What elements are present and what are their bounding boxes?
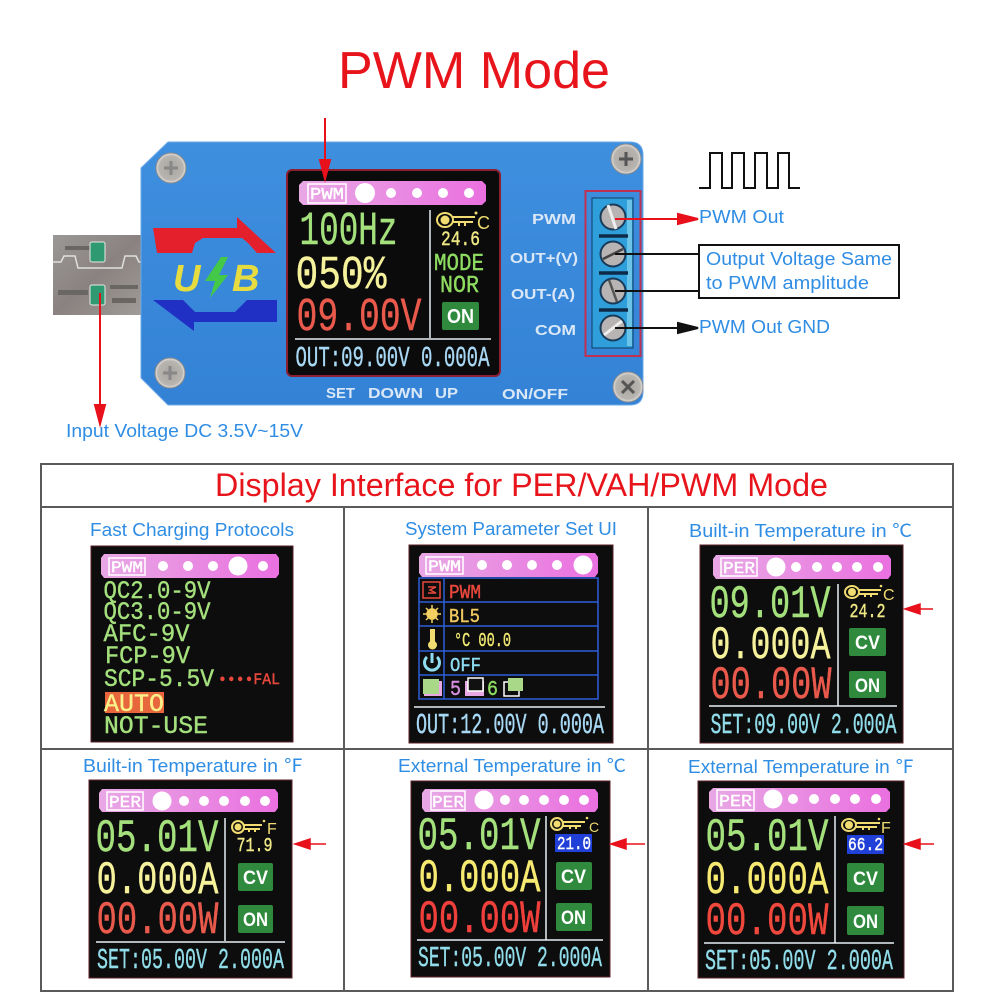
device key labels: PWM <box>532 211 576 228</box>
screen: built-in temperature F: SET:05.00V 2.000A <box>97 944 284 977</box>
screen: built-in temperature F: PER <box>109 794 141 813</box>
screen: built-in temperature F: F <box>267 821 277 838</box>
heading: external C: External Temperature in ℃ <box>398 756 626 776</box>
icon: USB logo with arrows: B <box>232 258 259 300</box>
screw: bottom right <box>613 372 643 402</box>
screen: external temperature C: 21.0 <box>557 835 591 855</box>
screen: built-in temperature C: SET:09.00V 2.000A <box>710 709 897 742</box>
device key labels: SET <box>326 385 355 402</box>
main display: PWM screen: PWM <box>310 186 344 205</box>
device key labels: OUT+(V) <box>510 250 578 267</box>
screen: fast charging protocols: FCP-9V <box>105 642 190 671</box>
screen: system parameter set: 6 <box>487 679 498 702</box>
screen: fast charging protocols: AFC-9V <box>104 620 190 649</box>
screen: built-in temperature C: ON <box>855 676 880 697</box>
screen: external temperature C: ON <box>561 908 586 929</box>
connector lines to output voltage box <box>615 254 699 291</box>
screen: external temperature F <box>698 781 904 978</box>
arrow: built-in C <box>905 604 933 614</box>
screen: external temperature F: CV <box>853 869 878 890</box>
screen: built-in temperature C: CV <box>855 633 880 654</box>
callout: output voltage: to PWM amplitude <box>706 273 869 293</box>
screen: external temperature F: ON <box>853 912 878 933</box>
icon: USB logo with arrows: U <box>173 258 202 300</box>
screen: built-in temperature C: C <box>883 587 895 604</box>
screen: system parameter set: OUT:12.00V 0.000A <box>416 709 604 742</box>
screen: system parameter set: °C 00.0 <box>454 630 511 652</box>
main display: PWM screen: 24.6 <box>441 229 480 252</box>
screen: external temperature F: PER <box>719 793 752 812</box>
heading: built-in C: Built-in Temperature in ℃ <box>689 521 912 541</box>
screen: external temperature C: 0.000A <box>418 853 541 905</box>
screen: external temperature F: 00.00W <box>706 896 829 948</box>
screen: external temperature C: 05.01V <box>418 811 541 863</box>
screen: system parameter set: PWM <box>449 582 481 604</box>
screen: system parameter set <box>409 545 613 743</box>
screen: fast charging protocols <box>91 546 293 742</box>
screen: built-in temperature C <box>700 545 903 743</box>
main display: PWM screen: C <box>477 213 490 233</box>
screen: system parameter set: PWM <box>428 558 461 576</box>
device key labels: UP <box>435 385 458 402</box>
screen: external temperature F: SET:05.00V 2.000A <box>705 945 893 978</box>
title: PWM Mode <box>338 42 610 100</box>
heading: external F: External Temperature in ℉ <box>688 757 914 777</box>
heading: fast charging: Fast Charging Protocols <box>90 520 294 540</box>
screen: system parameter set: OFF <box>450 655 481 677</box>
main display: PWM screen: MODE <box>434 251 484 278</box>
screen: built-in temperature F: 00.00W <box>96 895 219 947</box>
arrow: external C <box>611 839 645 849</box>
arrow: to PWM Out <box>615 214 698 224</box>
device key labels: ON/OFF <box>502 386 568 403</box>
main display: PWM screen <box>287 170 500 376</box>
arrow: USB input <box>95 293 105 424</box>
screen: fast charging protocols: QC2.0-9V <box>104 577 210 606</box>
main display: PWM screen: 050% <box>296 250 387 303</box>
screw: bottom left <box>155 358 185 388</box>
USB plug <box>53 235 142 315</box>
arrow: to PWM Out GND <box>615 323 698 333</box>
main display: PWM screen: 100Hz <box>300 206 398 259</box>
icon: USB logo with arrows <box>153 217 277 331</box>
icon: square wave <box>699 153 800 188</box>
label: PWM Out GND: PWM Out GND <box>699 317 830 337</box>
main display: PWM screen: NOR <box>440 273 479 300</box>
screen: external temperature C: 00.00W <box>418 894 541 946</box>
screen: built-in temperature C: PER <box>723 560 755 579</box>
screen: built-in temperature F: CV <box>243 868 268 889</box>
screen: built-in temperature F: ON <box>243 910 268 931</box>
terminal block <box>586 191 640 356</box>
screen: built-in temperature F: 71.9 <box>236 835 272 857</box>
device key labels: COM <box>535 322 576 339</box>
screen: external temperature F: 05.01V <box>706 812 829 864</box>
screw: top right <box>611 144 641 174</box>
label: PWM Out: PWM Out <box>699 207 784 227</box>
screen: external temperature C: PER <box>432 794 464 813</box>
screen: fast charging protocols: ••••FAL <box>218 671 280 689</box>
callout: output voltage <box>699 245 899 298</box>
screen: system parameter set: 5 <box>450 679 461 702</box>
screen: external temperature F: 66.2 <box>848 836 883 856</box>
screen: fast charging protocols: PWM <box>111 559 143 577</box>
screen: built-in temperature F: 0.000A <box>96 855 219 907</box>
screen: built-in temperature C: 24.2 <box>850 601 886 623</box>
screen: fast charging protocols: SCP-5.5V <box>104 665 214 694</box>
screen: built-in temperature C: 00.00W <box>710 660 832 712</box>
screen: external temperature C: SET:05.00V 2.000A <box>418 942 602 975</box>
screen: external temperature C <box>411 781 610 977</box>
device key labels <box>326 211 578 403</box>
screen: fast charging protocols: NOT-USE <box>104 712 208 741</box>
screen: built-in temperature C: 09.01V <box>710 579 831 631</box>
arrow: to display mode tag <box>320 118 330 179</box>
screen: external temperature C: CV <box>561 867 586 888</box>
arrow: built-in F <box>295 839 326 849</box>
heading: built-in F: Built-in Temperature in ℉ <box>83 756 303 776</box>
main display: PWM screen: 09.00V <box>296 292 422 345</box>
main display: PWM screen: OUT:09.00V 0.000A <box>296 342 490 375</box>
screw: top left <box>156 153 186 183</box>
screen: built-in temperature F <box>89 780 292 978</box>
screen: built-in temperature C: 0.000A <box>710 620 831 672</box>
device body <box>141 142 643 405</box>
main display: PWM screen: ON <box>447 306 474 328</box>
screen: external temperature F: 0.000A <box>706 855 829 907</box>
screen: fast charging protocols: AUTO <box>104 690 164 719</box>
table heading: Display Interface for PER/VAH/PWM Mode <box>215 467 828 503</box>
screen: external temperature F: F <box>881 820 891 837</box>
device key labels: OUT-(A) <box>511 286 575 303</box>
device key labels: DOWN <box>368 385 423 402</box>
label: input voltage: Input Voltage DC 3.5V~15V <box>66 421 303 441</box>
screen: built-in temperature F: 05.01V <box>96 813 219 865</box>
screen: system parameter set: BL5 <box>449 606 480 628</box>
panel: display interface table <box>41 464 953 991</box>
screen: fast charging protocols: QC3.0-9V <box>104 598 210 627</box>
callout: output voltage: Output Voltage Same <box>706 249 892 269</box>
arrow: external F <box>905 839 934 849</box>
heading: system parameter: System Parameter Set UI <box>405 519 617 539</box>
screen: external temperature C: C <box>589 819 599 835</box>
